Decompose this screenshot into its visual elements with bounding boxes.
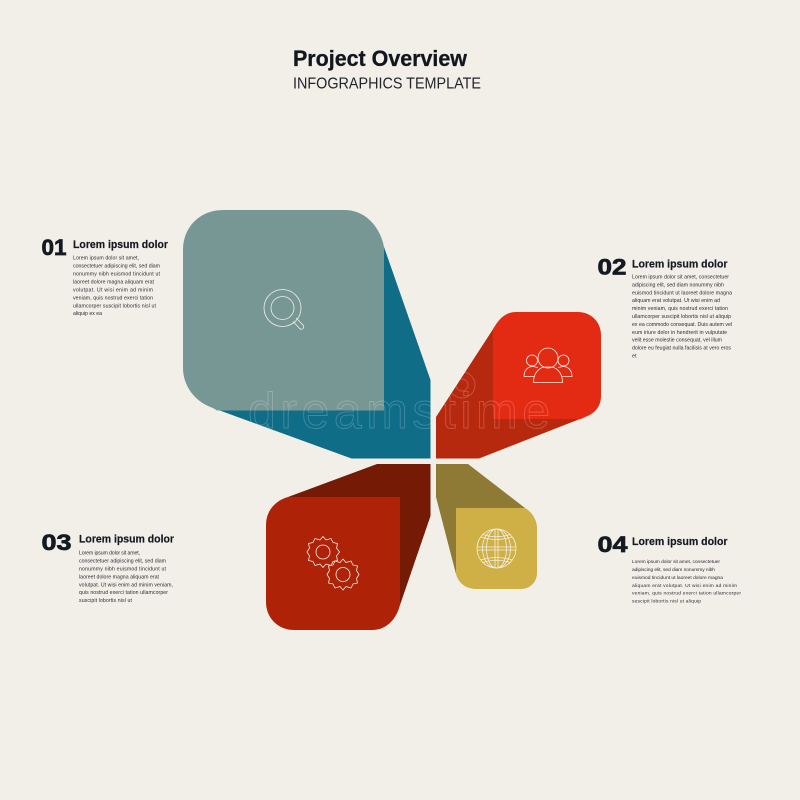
text block 01: nonummy nibh euismod tincidunt ut <box>73 272 161 278</box>
panel: petal 02 <box>436 312 601 458</box>
text block 03: nonummy nibh euismod tincidunt ut <box>79 566 167 572</box>
text block 02: aliquam erat volutpat. Ut wisi enim ad <box>632 298 720 304</box>
text block 02 <box>598 254 732 360</box>
icon: people group <box>524 348 572 382</box>
text block 02: ex ea commodo consequat. Duis autem vel <box>632 322 732 328</box>
text block 01: ullamcorper suscipit lobortis nisl ut <box>73 304 157 310</box>
text block 01: 01 <box>42 235 66 260</box>
text block 03: quis nostrud exerci tation ullamcorper <box>79 590 168 596</box>
text block 01: volutpat. Ut wisi enim ad minim <box>73 288 153 294</box>
text block 02: adipiscing elit, sed diam nonummy nibh <box>632 282 724 288</box>
text block 01: consectetuer adipiscing elit, sed diam <box>73 264 160 270</box>
text block 02: velit esse molestie consequat, vel illum <box>632 338 722 344</box>
text block 04: veniam, quis nostrud exerci tation ullamcorper <box>632 590 741 596</box>
text block 04: 04 <box>598 532 628 557</box>
text block 02: 02 <box>598 254 626 280</box>
text block 03: volutpat. Ut wisi enim ad minim veniam, <box>79 582 173 588</box>
text block 04: adipiscing elit, sed diam nonummy nibh <box>632 567 715 573</box>
text block 02: Lorem ipsum dolor <box>632 258 728 270</box>
text block 01: Lorem ipsum dolor <box>73 239 169 251</box>
text block 01: laoreet dolore magna aliquam erat <box>73 280 155 286</box>
text block 03: 03 <box>42 530 72 555</box>
text block 02: Lorem ipsum dolor sit amet, consectetuer <box>632 274 729 280</box>
icon: globe <box>477 529 516 568</box>
text block 01: Lorem ipsum dolor sit amet, <box>73 256 139 262</box>
text block 03: Lorem ipsum dolor sit amet, <box>79 550 140 556</box>
text block 03: laoreet dolore magna aliquam erat <box>79 574 160 580</box>
text block 04 <box>598 532 741 604</box>
panel: petal 01 <box>183 210 430 458</box>
text block 03: Lorem ipsum dolor <box>79 534 175 546</box>
text block 04: suscipit lobortis nisl ut aliquip <box>632 598 701 604</box>
text block 02: dolore eu feugiat nulla facilisis at vero eros <box>632 346 731 352</box>
watermark: dreamstime <box>248 383 550 439</box>
text block 02: minim veniam, quis nostrud exerci tation <box>632 306 728 312</box>
title: INFOGRAPHICS TEMPLATE <box>293 76 481 92</box>
text block 02: et <box>632 354 637 360</box>
text block 02: euismod tincidunt ut laoreet dolore magna <box>632 290 732 296</box>
text block 01: aliquip ex ea <box>73 311 102 317</box>
text block 01 <box>42 235 169 317</box>
text block 03 <box>42 530 175 604</box>
text block 04: aliquam erat volutpat. Ut wisi enim ad minim <box>632 583 737 589</box>
text block 03: suscipit lobortis nisl ut <box>79 598 133 604</box>
text block 02: ullamcorper suscipit lobortis nisl ut aliquip <box>632 314 731 320</box>
text block 03: consectetuer adipiscing elit, sed diam <box>79 558 166 564</box>
text block 01: veniam, quis nostrud exerci tation <box>73 296 153 302</box>
icon: gears <box>307 536 359 590</box>
panel: petal 03 <box>266 464 430 630</box>
icon: magnifying glass <box>264 290 304 329</box>
text block 04: euismod tincidunt ut laoreet dolore magna <box>632 575 723 581</box>
panel: petal 04 <box>436 464 537 589</box>
text block 04: Lorem ipsum dolor sit amet, consectetuer <box>632 559 720 565</box>
text block 02: eum iriure dolor in hendrerit in vulputate <box>632 330 727 336</box>
text block 04: Lorem ipsum dolor <box>632 536 728 548</box>
title: Project Overview <box>293 46 468 71</box>
title <box>293 46 481 92</box>
